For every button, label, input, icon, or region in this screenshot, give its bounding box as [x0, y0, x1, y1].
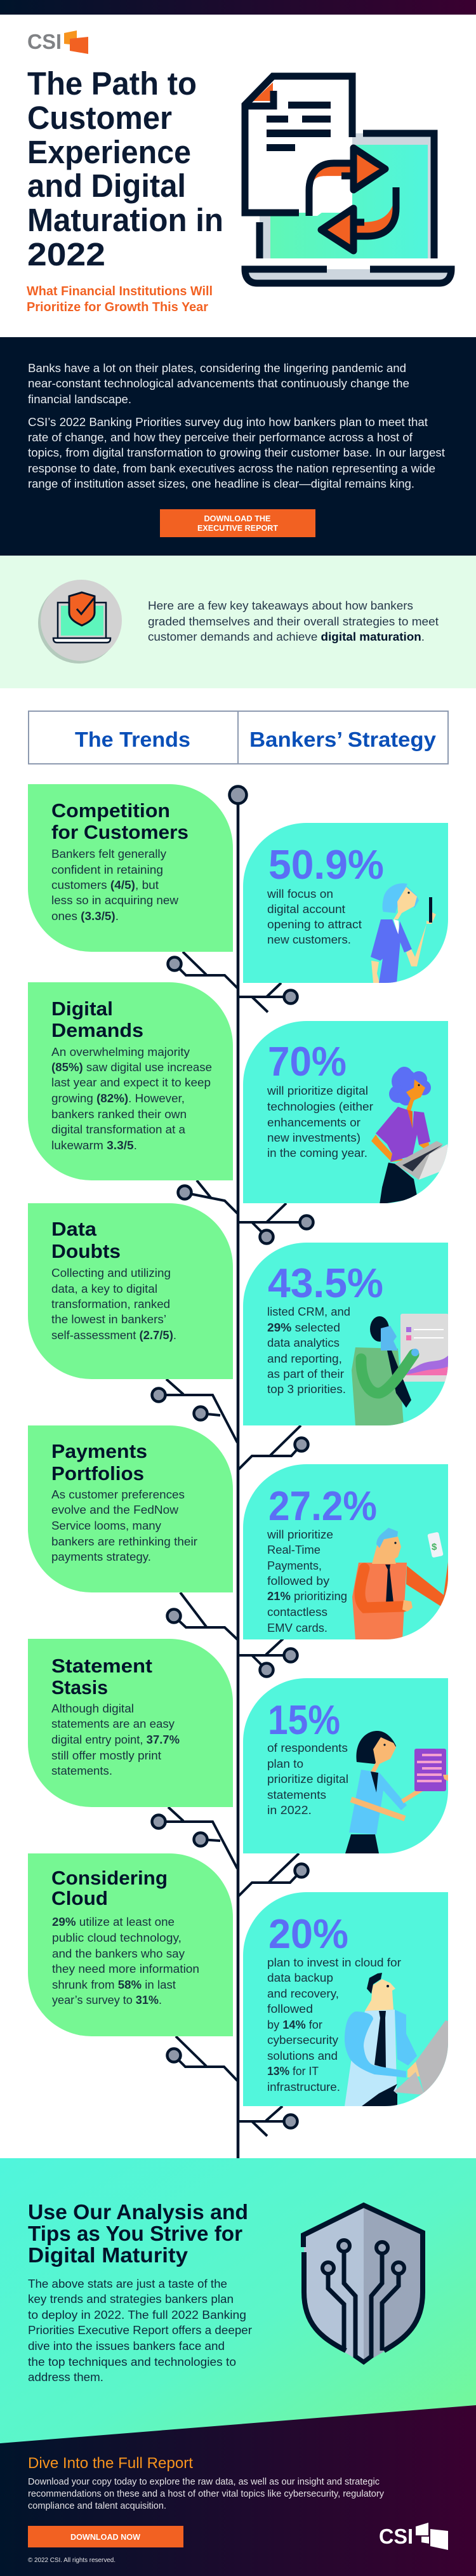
panel: data doubts: Doubts — [51, 1240, 121, 1262]
panel: payments portfolios — [28, 1425, 233, 1592]
panel: statement stasis: Statement — [51, 1655, 152, 1677]
top gradient bar — [0, 0, 476, 15]
body text: address them. — [28, 2370, 103, 2384]
panel: stat 70%: will prioritize digital — [267, 1084, 368, 1097]
panel: stat 50.9%: opening to attract — [267, 918, 362, 931]
panel: stat 27.2%: Real-Time — [267, 1544, 321, 1556]
panel: data doubts: Collecting and utilizing — [51, 1267, 171, 1279]
panel: stat 70%: in the coming year. — [267, 1147, 367, 1159]
panel: stat 70%: new investments) — [267, 1131, 360, 1144]
panel: stat 15%: 15% — [268, 1697, 340, 1743]
panel: stat 27.2%: Payments, — [267, 1559, 322, 1572]
panel: considering cloud — [28, 1853, 233, 2036]
illustration: woman with tablet — [345, 1731, 448, 1853]
intro text — [28, 361, 445, 490]
panel: statement stasis: digital entry point, 37.7% — [51, 1733, 180, 1746]
illustration: man at laptop — [345, 1973, 448, 2106]
panel: stat 20%: cybersecurity — [267, 2034, 338, 2046]
panel: dive into the full report — [0, 2405, 476, 2576]
panel: stat 43.5%: as part of their — [267, 1368, 344, 1380]
button: download the executive report: DOWNLOAD THE — [204, 514, 270, 523]
intro text: CSI’s 2022 Banking Priorities survey dug into how bankers plan to meet that — [28, 415, 428, 429]
illustration: woman looking at phone — [371, 883, 436, 983]
panel: analysis and tips — [0, 2158, 476, 2450]
intro text: financial landscape. — [28, 392, 131, 406]
panel: competition for customers: confident in retaining — [51, 864, 163, 876]
body text: The above stats are just a taste of the — [28, 2277, 227, 2290]
panel: stat 20%: data backup — [267, 1972, 333, 1984]
panel: statement stasis: Stasis — [51, 1676, 108, 1698]
panel: stat 20%: 20% — [268, 1911, 348, 1957]
panel: stat 27.2%: 21% prioritizing — [267, 1590, 347, 1603]
description text: compliance and talent acquisition. — [28, 2501, 166, 2511]
panel: considering cloud: and the bankers who say — [52, 1947, 185, 1960]
illustration: woman holding laptop — [371, 1067, 449, 1205]
panel: data doubts: transformation, ranked — [51, 1298, 170, 1311]
panel: stat 27.2%: 27.2% — [268, 1483, 377, 1529]
description text — [28, 2477, 385, 2511]
panel: competition for customers: Competition — [51, 799, 170, 822]
panel: stat 20%: followed — [267, 2003, 313, 2015]
title: 2022 — [27, 236, 105, 272]
heading: Use Our Analysis and — [28, 2200, 248, 2224]
panel: stat 50.9%: 50.9% — [268, 841, 384, 888]
panel: stat 20%: by 14% for — [267, 2019, 322, 2031]
takeaways text: customer demands and achieve digital maturation. — [148, 630, 425, 643]
title: Maturation in — [27, 202, 223, 238]
panel: statement stasis: statements are an easy — [51, 1718, 175, 1730]
intro text: near-constant technological advancements that continuously change the — [28, 377, 409, 390]
panel: stat 27.2%: EMV cards. — [267, 1622, 327, 1634]
panel: stat 20%: infrastructure. — [267, 2081, 340, 2093]
takeaways text: Here are a few key takeaways about how bankers — [148, 599, 413, 612]
panel: payments portfolios: bankers are rethinking their — [51, 1535, 197, 1548]
description text: recommendations on these and a host of other vital topics like cybersecurity, regulatory — [28, 2489, 385, 2499]
panel: stat 43.5%: and reporting, — [267, 1352, 342, 1365]
panel: stat 43.5%: 43.5% — [268, 1260, 383, 1306]
panel: digital demands: An overwhelming majority — [51, 1046, 190, 1058]
intro text: Banks have a lot on their plates, considering the lingering pandemic and — [28, 361, 406, 375]
body text: Priorities Executive Report offers a deeper — [28, 2323, 252, 2337]
panel: stat 20%: and recovery, — [267, 1987, 339, 2000]
copyright: © 2022 CSI. All rights reserved. — [28, 2557, 116, 2564]
heading: Tips as You Strive for — [28, 2222, 242, 2245]
panel: stat 43.5%: top 3 priorities. — [267, 1383, 346, 1396]
icon: laptop with shield in circle — [38, 580, 122, 664]
title: and Digital — [27, 168, 186, 204]
panel: stat 15%: plan to — [267, 1758, 303, 1770]
icon: circuit shield — [303, 2205, 424, 2363]
panel: considering cloud: Considering — [51, 1867, 168, 1889]
description text: Download your copy today to explore the raw data, as well as our insight and strategic — [28, 2477, 380, 2487]
panel: stat 43.5%: 29% selected — [267, 1321, 340, 1334]
panel: considering cloud: year’s survey to 31%. — [52, 1994, 162, 2006]
heading: Dive Into the Full Report — [28, 2455, 193, 2472]
panel: stat 20%: 13% for IT — [267, 2065, 319, 2078]
subtitle: What Financial Institutions Will — [27, 284, 213, 298]
panel: considering cloud: shrunk from 58% in last — [52, 1979, 176, 1991]
panel: competition for customers: Bankers felt generally — [51, 848, 166, 860]
panel: stat 15%: prioritize digital — [267, 1773, 348, 1785]
panel: considering cloud: Cloud — [51, 1887, 108, 1909]
button: download the executive report: EXECUTIVE REPORT — [197, 524, 278, 533]
intro text: range of institution asset sizes, one headline is clear—digital remains king. — [28, 477, 414, 490]
table header: the trends and bankers' strategy — [29, 711, 448, 764]
body text: to deploy in 2022. The full 2022 Banking — [28, 2308, 246, 2321]
panel: payments portfolios: Portfolios — [51, 1462, 144, 1485]
panel: stat 43.5% — [243, 1243, 449, 1425]
body text — [28, 2277, 252, 2384]
panel: statement stasis: still offer mostly print — [51, 1749, 161, 1762]
heading: Digital Maturity — [28, 2243, 188, 2267]
title — [27, 65, 223, 272]
subtitle: Prioritize for Growth This Year — [27, 300, 208, 314]
illustration: man with phone: $ — [432, 1542, 437, 1552]
panel: stat 43.5%: listed CRM, and — [267, 1305, 350, 1318]
panel: competition for customers: less so in acquiring new — [51, 894, 179, 907]
panel: stat 70% — [243, 1021, 449, 1205]
illustration: man with phone — [352, 1528, 448, 1639]
panel: statement stasis: statements. — [51, 1765, 112, 1777]
button: download now — [28, 2526, 183, 2547]
panel: digital demands: growing (82%). However, — [51, 1092, 185, 1105]
panel: stat 15% — [243, 1678, 448, 1853]
panel: payments portfolios: evolve and the FedNow — [51, 1504, 179, 1516]
panel: stat 27.2% — [243, 1464, 448, 1639]
panel: stat 15%: statements — [267, 1789, 326, 1801]
panel: statement stasis — [28, 1639, 233, 1807]
body text: dive into the issues bankers face and — [28, 2339, 225, 2352]
panel: digital demands: Demands — [51, 1019, 143, 1041]
panel: data doubts — [28, 1203, 233, 1379]
panel: competition for customers: ones (3.3/5). — [51, 910, 119, 923]
panel: payments portfolios: Payments — [51, 1440, 147, 1462]
panel: digital demands: Digital — [51, 998, 113, 1020]
icon: document and laptop with sync arrows — [245, 76, 451, 283]
panel: stat 43.5%: data analytics — [267, 1337, 340, 1349]
intro text: topics, from digital transformation to growing their customer base. In our largest — [28, 446, 445, 459]
panel: stat 50.9%: digital account — [267, 903, 345, 916]
panel: competition for customers: customers (4/5), but — [51, 879, 159, 891]
panel: stat 15%: of respondents — [267, 1742, 348, 1754]
panel: digital demands — [28, 982, 233, 1180]
panel: digital demands: bankers ranked their own — [51, 1108, 187, 1121]
illustration: man presenting chart — [352, 1314, 449, 1425]
button: download the executive report — [160, 509, 315, 537]
panel: stat 20%: plan to invest in cloud for — [267, 1956, 401, 1969]
CSI logo white — [379, 2523, 448, 2550]
panel: data doubts: Data — [51, 1218, 97, 1240]
title: Experience — [27, 134, 191, 170]
body text: key trends and strategies bankers plan — [28, 2292, 234, 2306]
panel: competition for customers — [28, 784, 233, 952]
timeline trunk and branches — [152, 786, 314, 2158]
table header: the trends and bankers' strategy: Bankers’ Strategy — [249, 728, 437, 751]
panel: stat 50.9% — [243, 823, 448, 983]
panel: stat 27.2%: will prioritize — [267, 1528, 333, 1541]
intro text: rate of change, and how they perceive their performance across a host of — [28, 430, 413, 444]
intro text: response to date, from bank executives across the nation representing a wide — [28, 462, 435, 475]
takeaways text: graded themselves and their overall strategies to meet — [148, 615, 439, 628]
heading — [28, 2200, 248, 2267]
panel: stat 27.2%: contactless — [267, 1606, 327, 1618]
panel: statement stasis: Although digital — [51, 1702, 134, 1715]
panel: data doubts: data, a key to digital — [51, 1283, 157, 1295]
table header: the trends and bankers' strategy: The Trends — [75, 728, 190, 751]
CSI logo: CSI — [27, 30, 62, 53]
panel: data doubts: the lowest in bankers’ — [51, 1313, 166, 1326]
panel: key takeaways — [0, 556, 476, 688]
panel: stat 50.9%: new customers. — [267, 933, 351, 946]
panel: competition for customers: for Customers — [51, 821, 188, 843]
panel: payments portfolios: As customer preferences — [51, 1488, 185, 1501]
panel: considering cloud: 29% utilize at least one — [52, 1916, 175, 1928]
CSI logo white: CSI — [379, 2525, 413, 2548]
panel: payments portfolios: payments strategy. — [51, 1551, 151, 1563]
panel: stat 15%: in 2022. — [267, 1804, 312, 1817]
panel: digital demands: digital transformation at a — [51, 1123, 186, 1136]
button: download now: DOWNLOAD NOW — [70, 2532, 141, 2542]
subtitle — [27, 284, 213, 314]
takeaways text — [148, 599, 439, 643]
title: Customer — [27, 100, 172, 136]
panel: data doubts: self-assessment (2.7/5). — [51, 1329, 176, 1342]
panel: digital demands: lukewarm 3.3/5. — [51, 1139, 137, 1152]
panel: stat 70%: technologies (either — [267, 1100, 373, 1113]
panel: considering cloud: public cloud technology, — [52, 1932, 182, 1944]
panel: payments portfolios: Service looms, many — [51, 1519, 161, 1532]
panel: stat 27.2%: followed by — [267, 1575, 329, 1587]
panel: dark intro — [0, 337, 476, 556]
CSI logo — [27, 30, 88, 54]
panel: stat 70%: enhancements or — [267, 1116, 360, 1129]
panel: stat 50.9%: will focus on — [267, 888, 333, 900]
panel: considering cloud: they need more information — [52, 1963, 199, 1975]
panel: stat 70%: 70% — [268, 1038, 347, 1084]
body text: the top techniques and technologies to — [28, 2355, 236, 2368]
title: The Path to — [27, 65, 197, 102]
panel: digital demands: (85%) saw digital use increase — [51, 1061, 212, 1074]
panel: stat 20%: solutions and — [267, 2050, 338, 2062]
panel: stat 20% — [243, 1892, 448, 2106]
panel: digital demands: last year and expect it to keep — [51, 1076, 211, 1089]
